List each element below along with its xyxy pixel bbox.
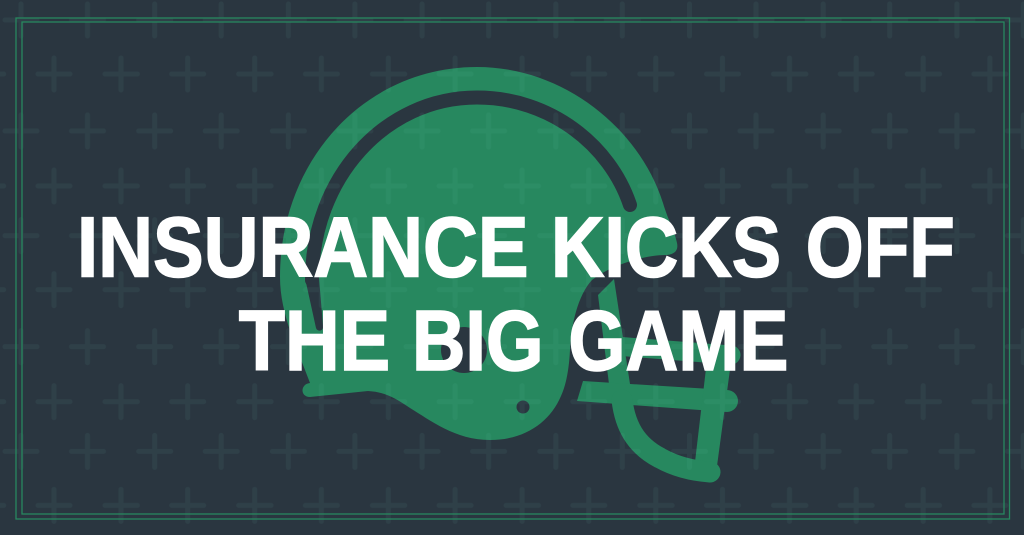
ear hole bbox=[516, 400, 530, 414]
title line 1 bbox=[77, 200, 955, 296]
helmet shell bbox=[280, 67, 677, 440]
icon: football helmet bbox=[280, 67, 738, 472]
lower bar bbox=[577, 381, 738, 412]
title line 1: KICKS bbox=[551, 200, 781, 296]
title line 1: INSURANCE bbox=[77, 200, 528, 296]
shell inner gap taper bbox=[305, 278, 323, 331]
upper bar bbox=[615, 346, 731, 355]
title line 1: OFF bbox=[806, 200, 955, 296]
face mask bbox=[577, 279, 738, 472]
chin curve bbox=[622, 400, 710, 472]
shell inner gap bbox=[312, 98, 630, 280]
title bbox=[77, 200, 955, 389]
title line 2 bbox=[239, 294, 788, 389]
title line 2: THE bbox=[239, 294, 390, 389]
right upright bbox=[695, 360, 731, 466]
title line 2: GAME bbox=[568, 294, 788, 389]
mask upright bbox=[598, 279, 630, 384]
side vent bbox=[441, 327, 487, 373]
title line 2: BIG bbox=[412, 294, 544, 389]
